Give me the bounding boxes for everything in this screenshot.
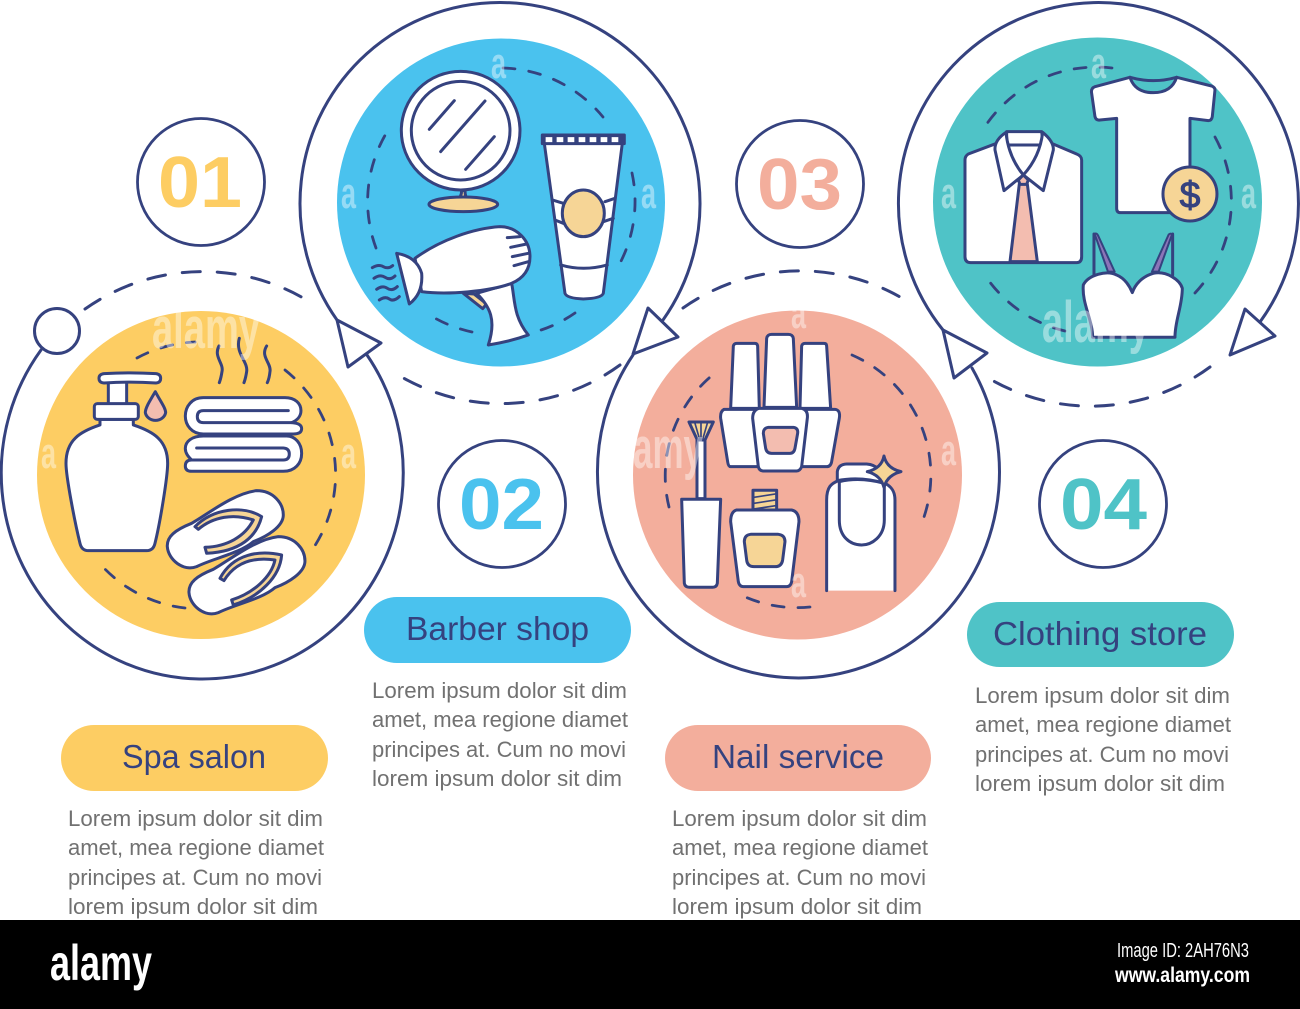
text block: Spa salon: lorem ipsum dolor sit dim [68, 894, 318, 919]
watermark letters: a [1241, 169, 1256, 218]
footer bar: Image ID: 2AH76N3 [1117, 940, 1249, 962]
text block: Barber shop: amet, mea regione diamet [372, 707, 628, 732]
watermark letters: a [1091, 39, 1106, 88]
panel: nail service disc [633, 310, 962, 640]
icon: nail items (polish bottles, brush, finger) [682, 334, 901, 591]
watermark letters: a [941, 169, 956, 218]
heading pill: Barber shop: Barber shop [406, 610, 589, 647]
timeline ring with arrows [1, 3, 1298, 679]
heading pill: Spa salon: Spa salon [122, 738, 266, 775]
watermark letters: a [341, 169, 356, 218]
text block: Nail service: lorem ipsum dolor sit dim [672, 894, 922, 919]
watermark letters: a [791, 558, 806, 607]
text block: Spa salon [68, 806, 324, 919]
text block: Clothing store: principes at. Cum no movi [975, 742, 1229, 767]
number badge 01: 01 [158, 143, 242, 223]
watermark letters: a [341, 429, 356, 478]
footer bar: www.alamy.com [1114, 964, 1250, 987]
number badge 03 [736, 120, 864, 248]
text block: Clothing store [975, 683, 1231, 796]
number badge 02: 02 [459, 465, 544, 545]
text block: Barber shop: Lorem ipsum dolor sit dim [372, 678, 627, 703]
text block: Spa salon: principes at. Cum no movi [68, 865, 322, 890]
watermark letters [41, 39, 1256, 607]
text block: Nail service [672, 806, 928, 919]
watermark letters: a [791, 289, 806, 338]
watermark letters: a [941, 426, 956, 475]
icon: clothing items (shirt, t-shirt with price, top) [965, 77, 1217, 337]
watermark letters: amy [633, 416, 703, 481]
watermark letters: a [491, 39, 506, 88]
text block: Clothing store: amet, mea regione diamet [975, 712, 1231, 737]
text block: Spa salon: Lorem ipsum dolor sit dim [68, 806, 323, 831]
heading pill: Clothing store [967, 602, 1234, 667]
watermark letters: alamy [1042, 290, 1150, 355]
heading pill: Spa salon [61, 725, 328, 791]
watermark letters: a [641, 169, 656, 218]
number badge 02 [438, 440, 566, 568]
number badge 03: 03 [757, 145, 842, 225]
footer bar: alamy [50, 935, 152, 991]
text block: Barber shop: principes at. Cum no movi [372, 737, 626, 762]
footer bar [0, 920, 1300, 1009]
text block: Spa salon: amet, mea regione diamet [68, 835, 324, 860]
icon: spa items (soap, towels, flip-flops) [66, 338, 305, 614]
text block: Clothing store: lorem ipsum dolor sit dim [975, 771, 1225, 796]
text block: Barber shop: lorem ipsum dolor sit dim [372, 766, 622, 791]
text block: Nail service: amet, mea regione diamet [672, 835, 928, 860]
number badge 04: 04 [1060, 465, 1147, 545]
text block: Barber shop [372, 678, 628, 791]
panel: clothing store disc [933, 38, 1262, 366]
text block: Nail service: principes at. Cum no movi [672, 865, 926, 890]
watermark letters: a [41, 429, 56, 478]
number badge 01 [138, 118, 264, 246]
inner dashed circles [103, 67, 1231, 608]
text block: Nail service: Lorem ipsum dolor sit dim [672, 806, 927, 831]
panel: barber shop disc [337, 38, 665, 366]
heading pill: Nail service: Nail service [712, 738, 884, 775]
heading pill: Clothing store: Clothing store [993, 615, 1207, 652]
watermark letters: alamy [152, 296, 260, 361]
heading pill: Nail service [665, 725, 931, 791]
icon: barber items (mirror, tube, hair dryer) [372, 71, 624, 345]
text block: Clothing store: Lorem ipsum dolor sit dim [975, 683, 1230, 708]
panel: spa salon disc [37, 311, 365, 639]
number badge 04 [1040, 440, 1166, 568]
heading pill: Barber shop [364, 597, 631, 663]
text: dollar sign: $ [1180, 173, 1201, 215]
